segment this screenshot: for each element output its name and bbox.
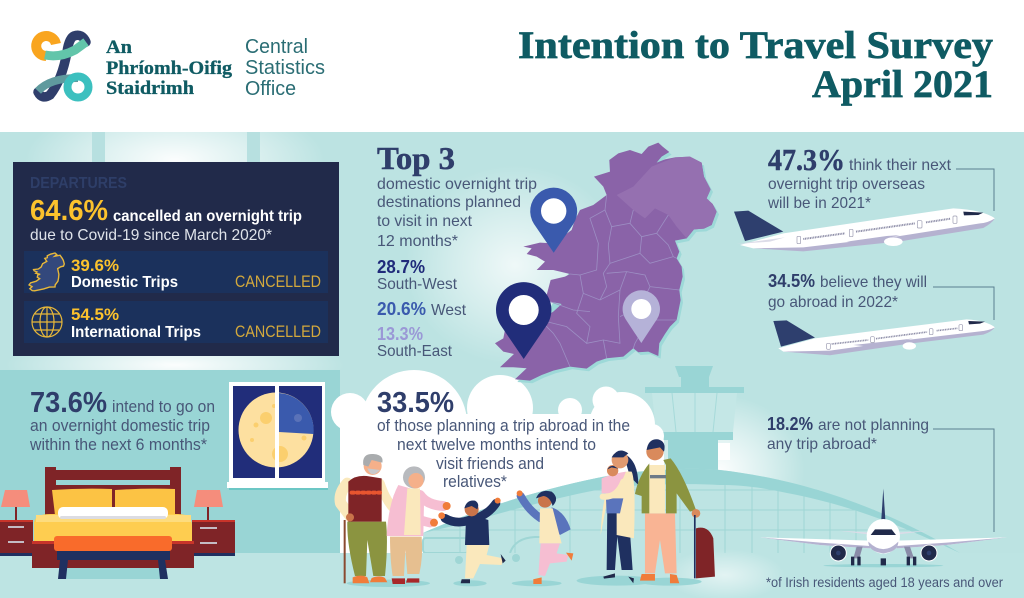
father with suitcase bbox=[635, 439, 715, 583]
pin: south-west bbox=[496, 282, 551, 359]
mother and baby bbox=[601, 450, 638, 583]
row: domestic trips: Domestic Trips bbox=[71, 274, 178, 291]
text: 73.6% domestic bbox=[29, 387, 215, 454]
plane 1 bbox=[734, 208, 995, 251]
front view plane bbox=[760, 488, 1007, 567]
text: top 3 destinations bbox=[377, 140, 537, 360]
text: 47.3% overseas 2021: overnight trip overseas bbox=[768, 176, 925, 193]
text: 18.2% no trip abroad: are not planning bbox=[818, 417, 929, 434]
text: 73.6% domestic: an overnight domestic trip bbox=[30, 417, 210, 435]
control tower bbox=[645, 366, 744, 472]
text: 47.3% overseas 2021: think their next bbox=[849, 157, 952, 174]
logo wordmark: English: Central bbox=[245, 36, 308, 58]
row: domestic trips bbox=[24, 251, 328, 293]
row: international trips bbox=[24, 301, 328, 343]
text: 34.5% abroad 2022: go abroad in 2022* bbox=[768, 294, 898, 311]
text: top 3 destinations: Top 3 bbox=[377, 140, 455, 176]
text: 34.5% abroad 2022: believe they will bbox=[820, 274, 927, 291]
text: top 3 destinations: South-East bbox=[377, 343, 453, 360]
panel: departures board bbox=[13, 162, 339, 356]
text: top 3 destinations: 28.7% bbox=[377, 257, 425, 277]
panel: departures board: DEPARTURES bbox=[30, 175, 127, 192]
boy bbox=[438, 498, 506, 583]
logo wordmark: Irish: Staidrimh bbox=[106, 78, 194, 99]
text: 33.5% friends and relatives bbox=[377, 387, 630, 491]
terminal building bbox=[420, 469, 960, 553]
pin: west bbox=[530, 188, 577, 253]
plane 2 bbox=[773, 319, 995, 355]
text: top 3 destinations: 12 months* bbox=[377, 233, 458, 250]
text: top 3 destinations: 20.6% bbox=[377, 299, 426, 319]
text: 73.6% domestic: within the next 6 months* bbox=[29, 436, 208, 454]
callout line: 47.3% bbox=[956, 169, 994, 211]
row: international trips: CANCELLED bbox=[235, 323, 321, 341]
title: April 2021 bbox=[812, 63, 993, 106]
text: 73.6% domestic: 73.6% bbox=[30, 387, 107, 419]
text: 34.5% abroad 2022 bbox=[768, 271, 927, 311]
logo wordmark: English: Office bbox=[245, 78, 296, 100]
footnote: *of Irish residents aged 18 years and over bbox=[766, 575, 1003, 590]
text: top 3 destinations: 13.3% bbox=[377, 324, 423, 344]
pin: south-east bbox=[623, 290, 660, 343]
illustration: family group bbox=[340, 439, 715, 587]
text: 34.5% abroad 2022: 34.5% bbox=[768, 271, 815, 291]
icon: window with moon bbox=[227, 382, 328, 490]
row: international trips: International Trips bbox=[71, 324, 201, 341]
row: domestic trips: CANCELLED bbox=[235, 273, 321, 291]
text: 47.3% overseas 2021 bbox=[767, 142, 952, 212]
logo bbox=[36, 35, 88, 98]
text: 33.5% friends and relatives: visit friends and bbox=[436, 455, 544, 473]
text: 33.5% friends and relatives: relatives* bbox=[443, 473, 508, 491]
text: top 3 destinations: destinations planned bbox=[377, 194, 521, 211]
text: top 3 destinations: West bbox=[431, 302, 467, 319]
text: 33.5% friends and relatives: next twelve months intend to bbox=[397, 436, 596, 454]
callout line: 34.5% bbox=[933, 287, 994, 320]
text: 18.2% no trip abroad: any trip abroad* bbox=[767, 436, 877, 453]
text: top 3 destinations: South-West bbox=[377, 276, 458, 293]
text: 33.5% friends and relatives: 33.5% bbox=[377, 387, 454, 419]
logo wordmark: English bbox=[245, 36, 325, 100]
text: 47.3% overseas 2021: will be in 2021* bbox=[767, 195, 871, 212]
girl bbox=[517, 490, 573, 584]
callout line: 18.2% bbox=[933, 429, 994, 532]
logo wordmark: Irish: Phríomh-Oifig bbox=[106, 58, 233, 79]
logo wordmark: Irish: An bbox=[106, 37, 132, 58]
grandfather bbox=[340, 454, 405, 583]
map of Ireland bbox=[495, 143, 719, 383]
logo wordmark: English: Statistics bbox=[245, 57, 325, 79]
panel: bedroom wall bbox=[0, 370, 340, 553]
text: 18.2% no trip abroad bbox=[767, 414, 929, 453]
text: top 3 destinations: to visit in next bbox=[377, 213, 473, 230]
logo wordmark: Irish bbox=[106, 37, 233, 99]
title: Intention to Travel Survey bbox=[518, 24, 994, 67]
title bbox=[518, 24, 994, 106]
floor bbox=[0, 549, 1024, 598]
text: 47.3% overseas 2021: 47.3% bbox=[768, 142, 845, 177]
panel: departures board: cancelled an overnight trip bbox=[113, 208, 302, 225]
grandmother bbox=[387, 466, 451, 584]
illustration: bed and nightstands bbox=[0, 467, 235, 579]
text: top 3 destinations: domestic overnight trip bbox=[377, 176, 537, 193]
white cloud bbox=[331, 370, 664, 553]
row: domestic trips: 39.6% bbox=[71, 256, 119, 275]
panel: departures board: due to Covid-19 since March 2020* bbox=[30, 227, 272, 244]
text: 33.5% friends and relatives: of those planning a trip abroad in the bbox=[377, 417, 630, 435]
text: 18.2% no trip abroad: 18.2% bbox=[767, 414, 813, 434]
text: 73.6% domestic: intend to go on bbox=[112, 398, 215, 416]
panel: departures board: 64.6% bbox=[30, 195, 108, 227]
row: international trips: 54.5% bbox=[71, 305, 119, 324]
